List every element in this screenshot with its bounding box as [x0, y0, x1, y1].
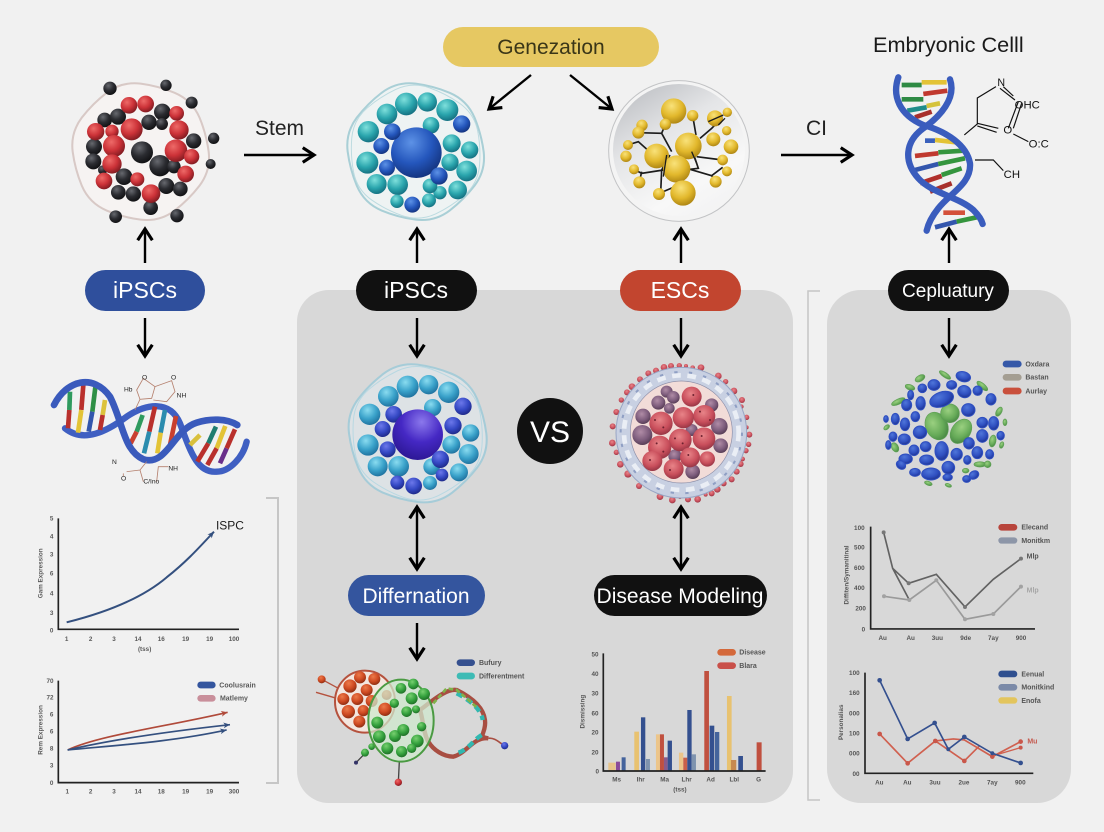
pill: ESCs red: ESCs	[651, 277, 709, 303]
chart: disease modeling bar chart: Lbl	[730, 776, 739, 783]
chart: right upper line chart: 0	[862, 626, 866, 633]
chart: disease modeling bar chart: G	[756, 776, 761, 783]
chart: right lower line chart: 7ay	[987, 780, 998, 787]
chart: left gene expression curve: (tss)	[138, 646, 151, 653]
icon: left DNA helix: O	[121, 476, 126, 483]
icon: blue and green cell cluster: Oxdara	[1025, 361, 1049, 368]
chart: right upper line chart: Monitkm	[1021, 538, 1050, 545]
arrow: iPSCs down	[144, 318, 146, 356]
chart: left gene expression curve: 14	[134, 636, 142, 643]
chart: left gene expression curve: 3	[50, 551, 54, 558]
chart: right upper line chart: 400	[854, 585, 865, 592]
arrow: disease cell to disease modeling	[680, 507, 682, 569]
chart: right lower line chart: 00	[852, 771, 860, 778]
chart: disease modeling bar chart: 20	[591, 749, 599, 756]
chart: right upper line chart: 900	[1016, 635, 1027, 642]
chart: right lower line chart: Au	[875, 780, 884, 787]
chart: left gene expression curve: 0	[50, 627, 54, 634]
chart: disease modeling bar chart: 0	[596, 769, 600, 776]
chart: right upper line chart: Diffiten/Symanitinal	[843, 545, 850, 605]
panel: center comparison	[297, 290, 793, 803]
chart: right lower line chart: 000	[849, 711, 860, 718]
chart: disease modeling bar chart: 30	[591, 690, 599, 697]
chart: right lower line chart: 100	[849, 670, 860, 677]
chart: right upper line chart: Elecand	[1021, 525, 1048, 532]
chart: left arrow line chart	[37, 678, 256, 796]
pill: Differnation: Differnation	[362, 585, 470, 608]
chart: left gene expression curve: 2	[89, 636, 93, 643]
chart: left arrow line chart: 18	[158, 789, 165, 796]
chart: right lower line chart: Personalias	[838, 704, 845, 740]
chart: right lower line chart: Eenual	[1021, 671, 1044, 678]
heading pill: Genezation	[443, 27, 659, 67]
chart: disease modeling bar chart: Ma	[660, 776, 670, 783]
icon: blue and green cell cluster: Aurlay	[1025, 388, 1047, 395]
icon: DNA helix with chemical structure: OHC	[1015, 100, 1040, 112]
icon: blue and green cell cluster	[883, 361, 1049, 488]
pill: Disease Modeling	[594, 575, 767, 616]
chart: left arrow line chart: Matlemy	[220, 696, 248, 703]
chart: left arrow line chart: 14	[134, 789, 142, 796]
icon: differentiating cells molecule: Bufury	[479, 660, 502, 667]
chart: right lower line chart: Au	[903, 780, 912, 787]
chart: left arrow line chart: 6	[50, 712, 54, 719]
icon: red disease cell	[609, 363, 752, 503]
chart: left arrow line chart: 19	[206, 789, 214, 796]
chart: left arrow line chart: 19	[182, 789, 190, 796]
chart: right lower line chart: 000	[849, 751, 860, 758]
arrow: generation to teal cell	[489, 75, 531, 109]
icon: DNA helix with chemical structure: O:C	[1029, 138, 1049, 150]
icon: violet stem cell	[339, 355, 496, 512]
chart: disease modeling bar chart: Ad	[706, 776, 715, 783]
icon: DNA helix with chemical structure: O	[1003, 125, 1012, 137]
icon: DNA helix with chemical structure: N	[997, 77, 1005, 89]
chart: left arrow line chart: 3	[112, 789, 116, 796]
icon: left DNA helix: C/Ino	[143, 478, 160, 485]
chart: left gene expression curve: 3	[50, 610, 54, 617]
arrow: Cepluatury up	[948, 229, 950, 263]
icon: red and black cell	[72, 80, 219, 223]
arrow: generation to yellow cell	[570, 75, 612, 109]
chart: left gene expression curve: 1	[65, 636, 69, 643]
pill: iPSCs blue	[85, 270, 205, 311]
chart: left arrow line chart: 300	[229, 789, 240, 796]
chart: disease modeling bar chart: Blara	[739, 663, 757, 670]
chart: disease modeling bar chart: (tss)	[673, 786, 687, 793]
chart: left gene expression curve: 4	[50, 533, 54, 540]
chart: right lower line chart: Mu	[1027, 739, 1037, 746]
chart: right lower line chart: 2ue	[959, 780, 970, 787]
chart: disease modeling bar chart: Dismissing	[580, 695, 587, 729]
arrow: center iPSCs up	[416, 229, 418, 263]
chart: left gene expression curve: 5	[50, 516, 54, 523]
chart: right upper line chart: 500	[854, 545, 865, 552]
pill: iPSCs blue: iPSCs	[113, 277, 177, 303]
icon: left DNA helix: NH	[168, 466, 178, 473]
chart: right upper line chart: Au	[906, 635, 915, 642]
icon: yellow molecular cell in dish	[609, 81, 749, 221]
pill: Cepluatury black: Cepluatury	[902, 281, 994, 302]
chart: left gene expression curve	[37, 516, 244, 653]
pill: Disease Modeling: Disease Modeling	[597, 585, 763, 608]
icon: left DNA helix: Hb	[124, 386, 133, 393]
chart: disease modeling bar chart: 60	[591, 711, 599, 718]
arrow: ESCs up	[680, 229, 682, 263]
chart: left gene expression curve: 19	[182, 636, 190, 643]
arrow: center iPSCs down	[416, 318, 418, 356]
pill: ESCs red	[620, 270, 741, 311]
chart: left arrow line chart: 1	[66, 789, 70, 796]
chart: disease modeling bar chart: Disease	[739, 650, 766, 657]
badge: VS: VS	[530, 416, 570, 449]
chart: left arrow line chart: 6	[50, 728, 54, 735]
chart: left gene expression curve: 6	[50, 571, 54, 578]
arrow: violet cell to differentiation	[416, 507, 418, 569]
chart: disease modeling bar chart: Lhr	[682, 776, 692, 783]
icon: left DNA helix: NH	[177, 392, 186, 399]
chart: left arrow line chart: 70	[46, 678, 54, 685]
chart: disease modeling bar chart: 50	[591, 652, 599, 659]
chart: left gene expression curve: 3	[112, 636, 116, 643]
icon: teal stem cell	[338, 74, 494, 230]
pill: Differnation	[348, 575, 485, 616]
chart: right upper line chart: Mlp	[1027, 553, 1039, 560]
chart: left gene expression curve: Gam Expression	[37, 548, 44, 598]
badge: VS	[517, 398, 583, 464]
chart: right upper line chart: 100	[854, 525, 865, 532]
chart: disease modeling bar chart: Ms	[612, 776, 622, 783]
chart: disease modeling bar chart: 40	[591, 671, 599, 678]
icon: differentiating cells molecule	[316, 659, 525, 786]
chart: left arrow line chart: Rem Expression	[37, 705, 44, 755]
chart: right upper line chart	[843, 524, 1050, 642]
label: Stem: Stem	[255, 117, 304, 140]
title: Embryonic Cell: Embryonic Celll	[873, 32, 1024, 57]
chart: disease modeling bar chart: Ihr	[637, 776, 645, 783]
arrow: differentiation down	[416, 623, 418, 659]
chart: disease modeling bar chart	[580, 649, 766, 793]
chart: right upper line chart: 7ay	[988, 635, 999, 642]
icon: DNA helix with chemical structure	[896, 77, 1049, 231]
chart: left arrow line chart: Coolusrain	[219, 682, 256, 689]
chart: left arrow line chart: 3	[50, 763, 54, 770]
arrow: Cepluatury down	[948, 318, 950, 356]
chart: right upper line chart: Au	[878, 635, 887, 642]
chart: right upper line chart: 3uu	[932, 635, 943, 642]
icon: blue and green cell cluster: Bastan	[1025, 375, 1049, 382]
chart: right lower line chart: 160	[849, 690, 860, 697]
icon: DNA helix with chemical structure: CH	[1004, 169, 1020, 181]
chart: left arrow line chart: 2	[89, 789, 93, 796]
chart: left arrow line chart: 72	[46, 695, 54, 702]
icon: left DNA helix: O	[171, 374, 176, 381]
icon: left DNA helix: O	[142, 375, 147, 382]
heading pill: Genezation: Genezation	[497, 36, 605, 59]
panel: embryonic right column	[827, 290, 1071, 803]
arrow: yellow cell to DNA	[781, 154, 852, 156]
chart: left gene expression curve: 4	[50, 591, 54, 598]
chart: right lower line chart: Monitkind	[1021, 685, 1054, 692]
chart: right lower line chart: Enofa	[1021, 698, 1041, 705]
pill: iPSCs black: iPSCs	[384, 277, 448, 303]
chart: disease modeling bar chart: 20	[591, 730, 599, 737]
icon: differentiating cells molecule: Differentment	[479, 673, 525, 680]
pill: iPSCs black	[356, 270, 477, 311]
chart: left gene expression curve: 16	[158, 636, 165, 643]
chart: left arrow line chart: 8	[50, 746, 54, 753]
chart: left gene expression curve: 100	[229, 636, 240, 643]
chart: right upper line chart: 200	[855, 606, 866, 613]
chart: right lower line chart: 3uu	[929, 780, 941, 787]
arrow: stem to blue cell	[244, 154, 314, 156]
arrow: iPSCs up	[144, 229, 146, 263]
chart: right upper line chart: Mlp	[1027, 587, 1039, 594]
chart: left gene expression curve: ISPC	[216, 518, 244, 532]
chart: right lower line chart	[838, 670, 1054, 787]
chart: right upper line chart: 600	[854, 565, 865, 572]
icon: left DNA helix: N	[112, 459, 117, 466]
label: CI: CI	[806, 117, 827, 140]
chart: right upper line chart: 9de	[960, 635, 972, 642]
chart: left gene expression curve: 19	[206, 636, 214, 643]
icon: left DNA helix	[54, 374, 247, 485]
chart: right lower line chart: 100	[849, 731, 860, 738]
chart: left arrow line chart: 0	[50, 780, 54, 787]
chart: right lower line chart: 900	[1015, 780, 1026, 787]
pill: Cepluatury black	[888, 270, 1009, 311]
arrow: ESCs down	[680, 318, 682, 356]
